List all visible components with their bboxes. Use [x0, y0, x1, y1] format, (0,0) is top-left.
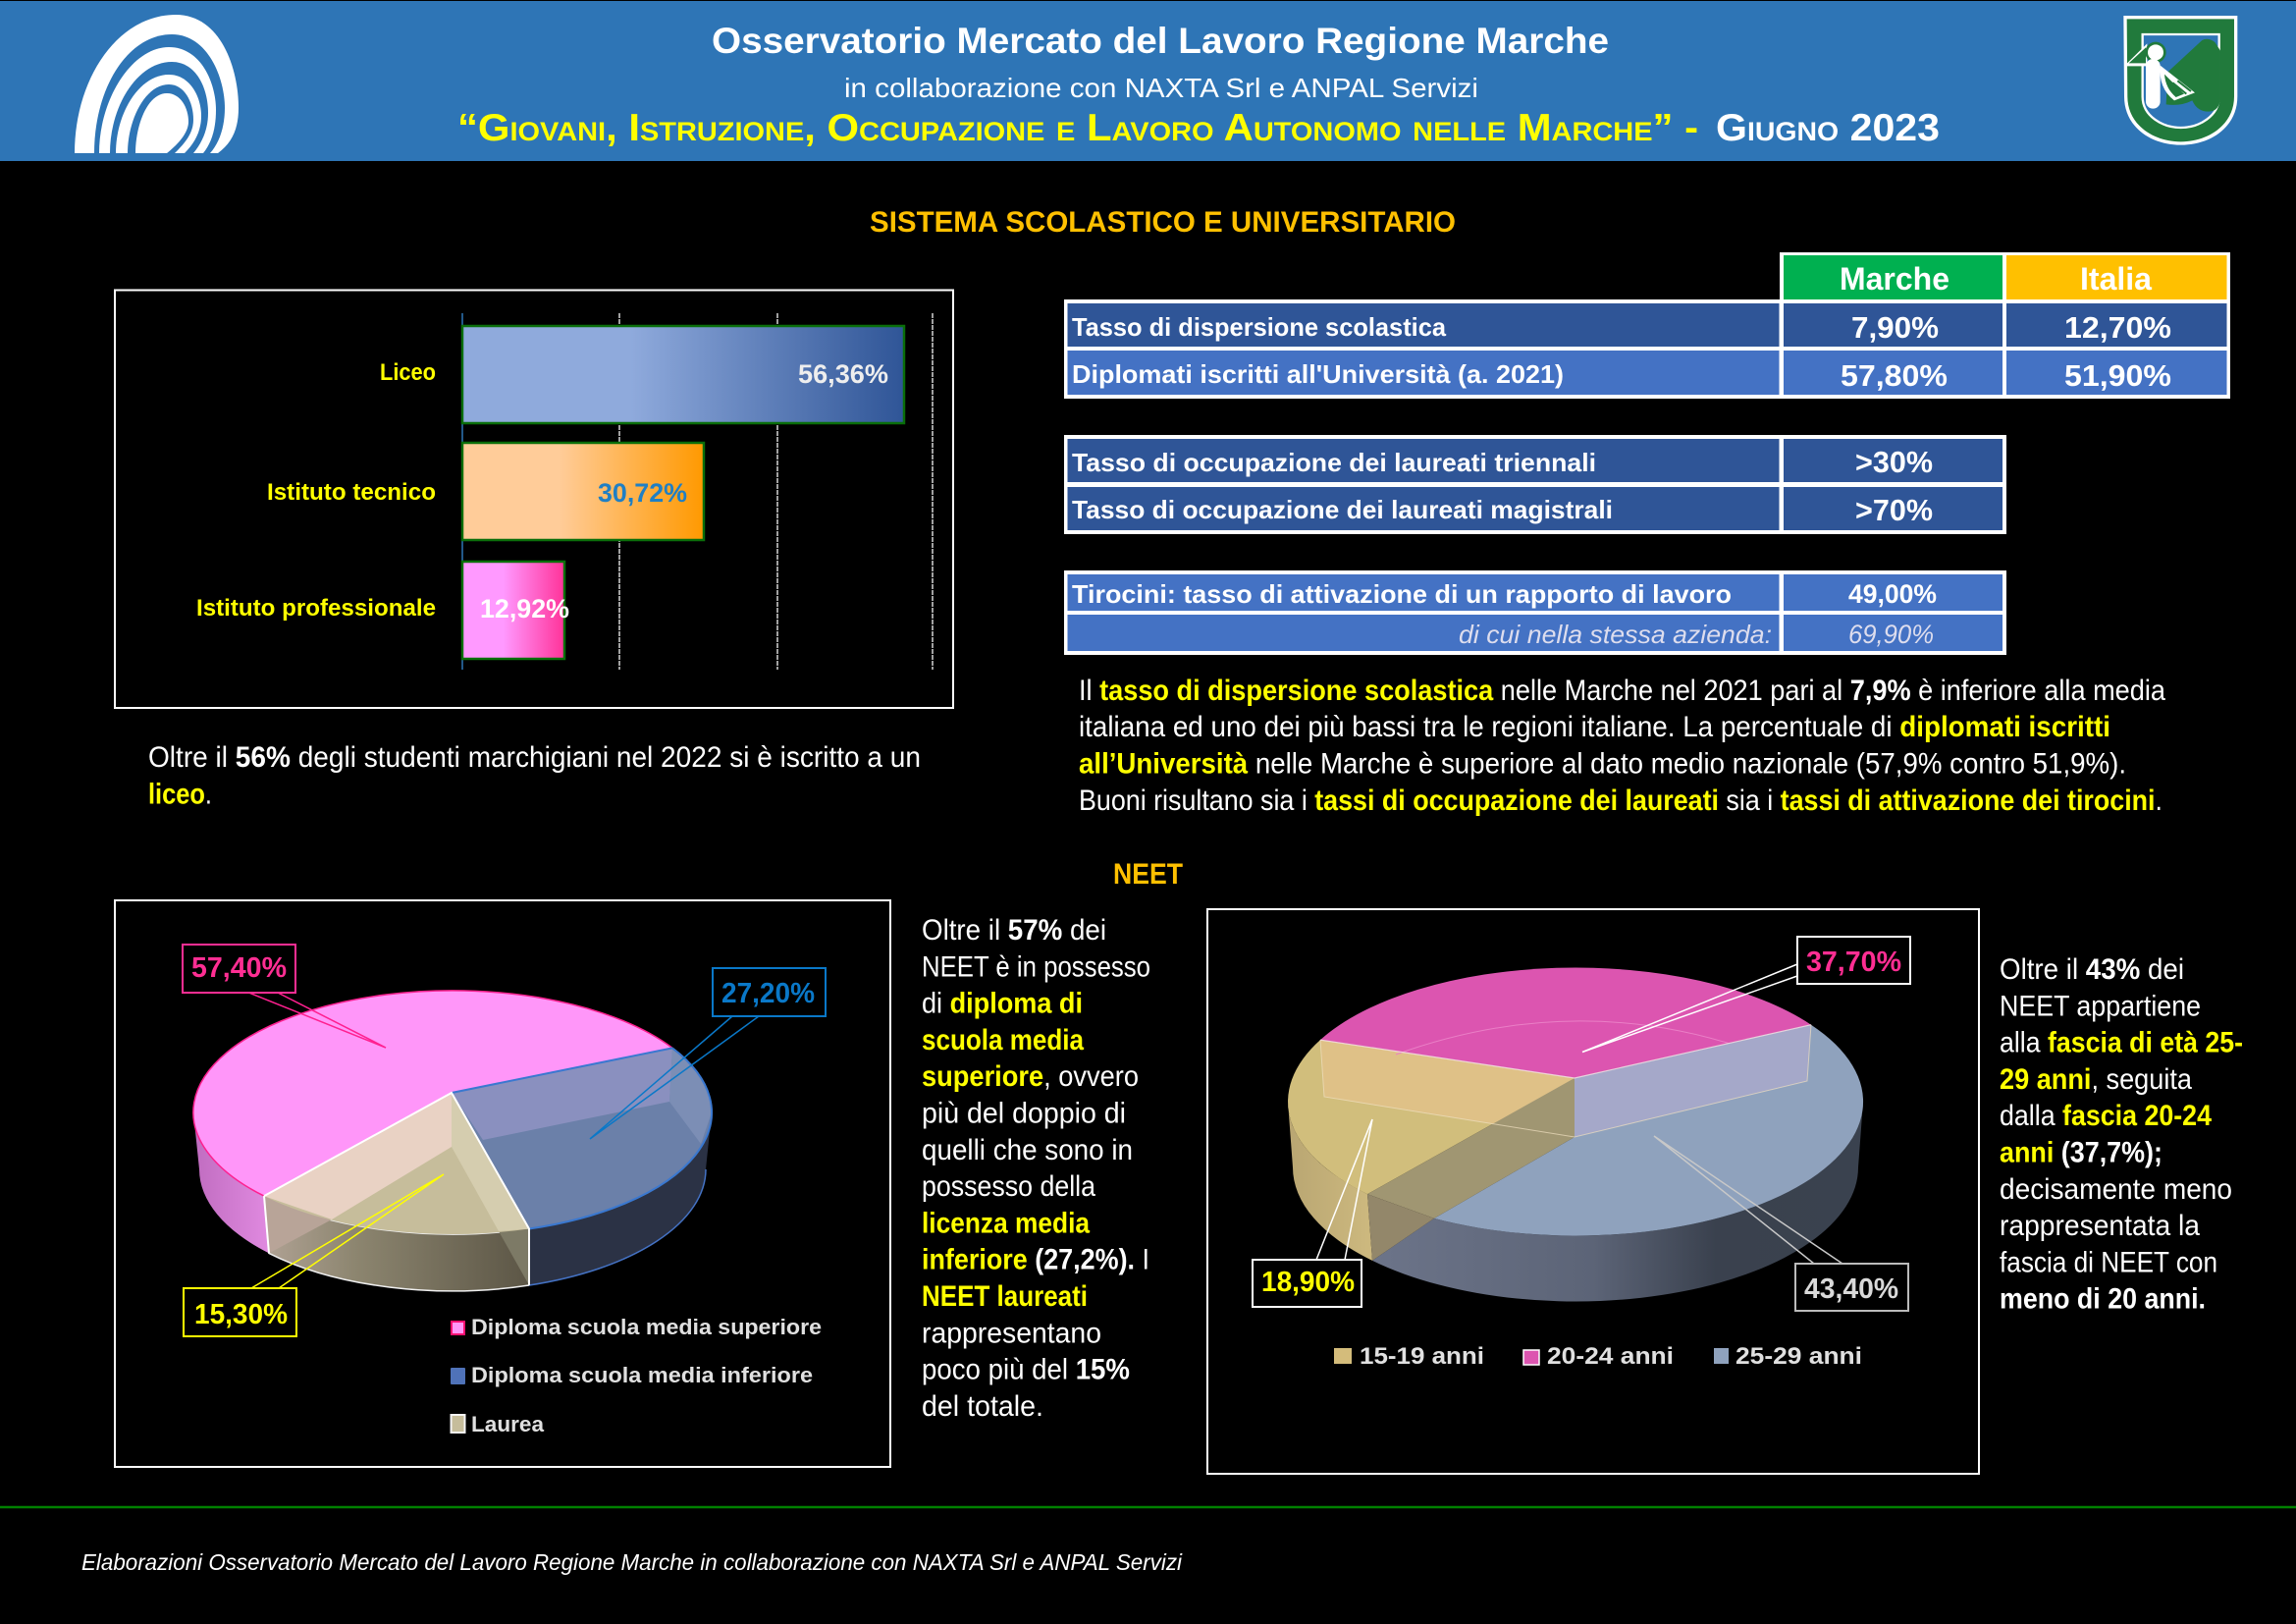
table: Marche vs Italia: 57,80%: [1841, 358, 1948, 393]
callout: 43,40%: [1654, 1136, 1908, 1311]
callout: 43,40%: 43,40%: [1804, 1273, 1898, 1305]
heading: sistema scolastico: SISTEMA SCOLASTICO E UNIVERSITARIO: [870, 206, 1456, 239]
text block: NEET fasce di età: rappresentata la: [2000, 1210, 2200, 1242]
text block: NEET titolo di studio: NEET è in possesso: [922, 950, 1150, 983]
table: Marche vs Italia: Italia: [2080, 261, 2152, 297]
table: occupazione laureati: >30%: [1855, 445, 1933, 479]
table: Marche vs Italia: Diplomati iscritti all'Università (a. 2021): [1072, 359, 1564, 389]
text block: NEET fasce di età: decisamente meno: [2000, 1173, 2232, 1206]
table: occupazione laureati: Tasso di occupazione dei laureati magistrali: [1072, 495, 1613, 524]
panel: pie chart titolo di studio: [115, 900, 890, 1467]
text block: NEET fasce di età: alla fascia di età 25-: [2000, 1027, 2243, 1059]
text block: dispersione scolastica: italiana ed uno dei più bassi tra le regioni italiane. La percentuale di diplomati iscritti: [1079, 711, 2110, 743]
panel: bar chart scuole: [115, 291, 953, 708]
text block: dispersione scolastica: [1079, 675, 2165, 817]
legend: fasce di età: 25-29 anni: [1735, 1343, 1862, 1370]
title: Osservatorio Mercato del Lavoro Regione Marche: [712, 21, 1609, 61]
legend: fasce di età: 20-24 anni: [1547, 1343, 1674, 1370]
callout: 57,40%: [183, 945, 386, 1048]
text block: NEET titolo di studio: poco più del 15%: [922, 1354, 1130, 1386]
table: tirocini: [1064, 570, 2006, 655]
header band: [0, 1, 2296, 161]
table: tirocini: di cui nella stessa azienda:: [1459, 620, 1772, 649]
report title: “Giovani, Istruzione, Occupazione e Lavoro Autonomo nelle Marche” -: [457, 107, 1698, 149]
table: Marche vs Italia: [1064, 252, 2230, 399]
callout: 37,70%: 37,70%: [1806, 947, 1901, 978]
text block: NEET titolo di studio: possesso della: [922, 1170, 1095, 1203]
table: occupazione laureati: [1064, 435, 2006, 534]
bar: Istituto tecnico: 30,72%: [598, 478, 687, 508]
text block: NEET titolo di studio: più del doppio di: [922, 1098, 1126, 1129]
text block: dispersione scolastica: Il tasso di dispersione scolastica nelle Marche nel 2021 pari al 7,9% è inferiore alla media: [1079, 675, 2165, 707]
legend: titolo di studio: Diploma scuola media superiore: [471, 1315, 822, 1339]
icon: Regione Marche shield: [2123, 16, 2237, 145]
bar: Liceo: Liceo: [380, 359, 436, 386]
text block: liceo: [148, 741, 921, 811]
text block: NEET titolo di studio: scuola media: [922, 1024, 1084, 1056]
text block: NEET fasce di età: fascia di NEET con: [2000, 1246, 2217, 1278]
text block: NEET fasce di età: 29 anni, seguita: [2000, 1063, 2192, 1096]
text block: NEET titolo di studio: superiore, ovvero: [922, 1060, 1139, 1093]
text block: NEET titolo di studio: licenza media: [922, 1207, 1090, 1239]
bar: Liceo: 56,36%: [798, 359, 888, 389]
callout: 18,90%: 18,90%: [1261, 1267, 1355, 1298]
bar: Istituto professionale: [196, 562, 569, 659]
callout: 27,20%: [590, 968, 826, 1139]
table: occupazione laureati: Tasso di occupazione dei laureati triennali: [1072, 448, 1596, 477]
callout: 27,20%: 27,20%: [721, 978, 815, 1009]
bar: Liceo: [380, 326, 904, 423]
text block: liceo: liceo.: [148, 778, 212, 811]
legend: titolo di studio: [451, 1315, 822, 1436]
legend: fasce di età: 15-19 anni: [1360, 1343, 1484, 1370]
text block: NEET fasce di età: Oltre il 43% dei: [2000, 953, 2184, 986]
text block: NEET titolo di studio: del totale.: [922, 1390, 1043, 1423]
text block: NEET titolo di studio: rappresentano: [922, 1317, 1101, 1349]
callout: 15,30%: 15,30%: [194, 1299, 288, 1330]
table: Marche vs Italia: 51,90%: [2064, 358, 2171, 393]
panel: pie chart fasce di età: [1207, 909, 1979, 1474]
callout: 18,90%: [1253, 1119, 1372, 1307]
text block: NEET titolo di studio: inferiore (27,2%). I: [922, 1244, 1149, 1276]
legend: titolo di studio: Laurea: [471, 1412, 545, 1436]
report date: Giugno 2023: [1716, 107, 1940, 149]
heading: NEET: NEET: [1113, 858, 1183, 891]
icon: observatory logo arches: [75, 15, 239, 153]
callout: 15,30%: [184, 1174, 444, 1336]
legend: titolo di studio: Diploma scuola media inferiore: [471, 1363, 813, 1387]
text block: NEET titolo di studio: NEET laureati: [922, 1280, 1088, 1313]
text block: NEET fasce di età: meno di 20 anni.: [2000, 1283, 2206, 1316]
table: tirocini: Tirocini: tasso di attivazione di un rapporto di lavoro: [1072, 579, 1732, 609]
text block: NEET fasce di età: [2000, 953, 2243, 1316]
bar: Istituto tecnico: Istituto tecnico: [267, 479, 436, 506]
table: occupazione laureati: >70%: [1855, 493, 1933, 527]
legend: fasce di età: [1334, 1343, 1862, 1370]
subtitle: in collaborazione con NAXTA Srl e ANPAL Servizi: [844, 73, 1478, 103]
pie: fasce di età: [1288, 968, 1863, 1301]
text block: NEET titolo di studio: quelli che sono in: [922, 1134, 1133, 1166]
callout: 57,40%: 57,40%: [191, 952, 287, 984]
callout: 37,70%: [1582, 937, 1910, 1053]
bar: Istituto professionale: 12,92%: [480, 594, 569, 623]
bar: Istituto professionale: Istituto professionale: [196, 595, 436, 622]
text block: NEET titolo di studio: Oltre il 57% dei: [922, 914, 1106, 947]
text block: NEET titolo di studio: [922, 914, 1150, 1423]
table: Marche vs Italia: Tasso di dispersione scolastica: [1072, 312, 1447, 342]
text block: NEET fasce di età: NEET appartiene: [2000, 990, 2201, 1022]
table: Marche vs Italia: 7,90%: [1851, 310, 1939, 345]
table: tirocini: 49,00%: [1848, 579, 1937, 609]
table: Marche vs Italia: Marche: [1840, 261, 1949, 297]
footer note: Elaborazioni Osservatorio Mercato del Lavoro Regione Marche in collaborazione con NAXTA Srl e ANPAL Servizi: [81, 1549, 1183, 1575]
text block: dispersione scolastica: all’Università nelle Marche è superiore al dato medio nazionale (57,9% contro 51,9%).: [1079, 748, 2126, 780]
pie: titolo di studio: [193, 991, 712, 1291]
bar: Istituto tecnico: [267, 443, 704, 540]
text block: NEET titolo di studio: di diploma di: [922, 988, 1083, 1020]
text block: NEET fasce di età: dalla fascia 20-24: [2000, 1100, 2212, 1132]
text block: NEET fasce di età: anni (37,7%);: [2000, 1137, 2163, 1168]
table: Marche vs Italia: 12,70%: [2064, 310, 2171, 345]
text block: liceo: Oltre il 56% degli studenti marchigiani nel 2022 si è iscritto a un: [148, 741, 921, 774]
table: tirocini: 69,90%: [1848, 620, 1934, 649]
text block: dispersione scolastica: Buoni risultano sia i tassi di occupazione dei laureati sia i tassi di attivazione dei tirocini.: [1079, 785, 2163, 817]
